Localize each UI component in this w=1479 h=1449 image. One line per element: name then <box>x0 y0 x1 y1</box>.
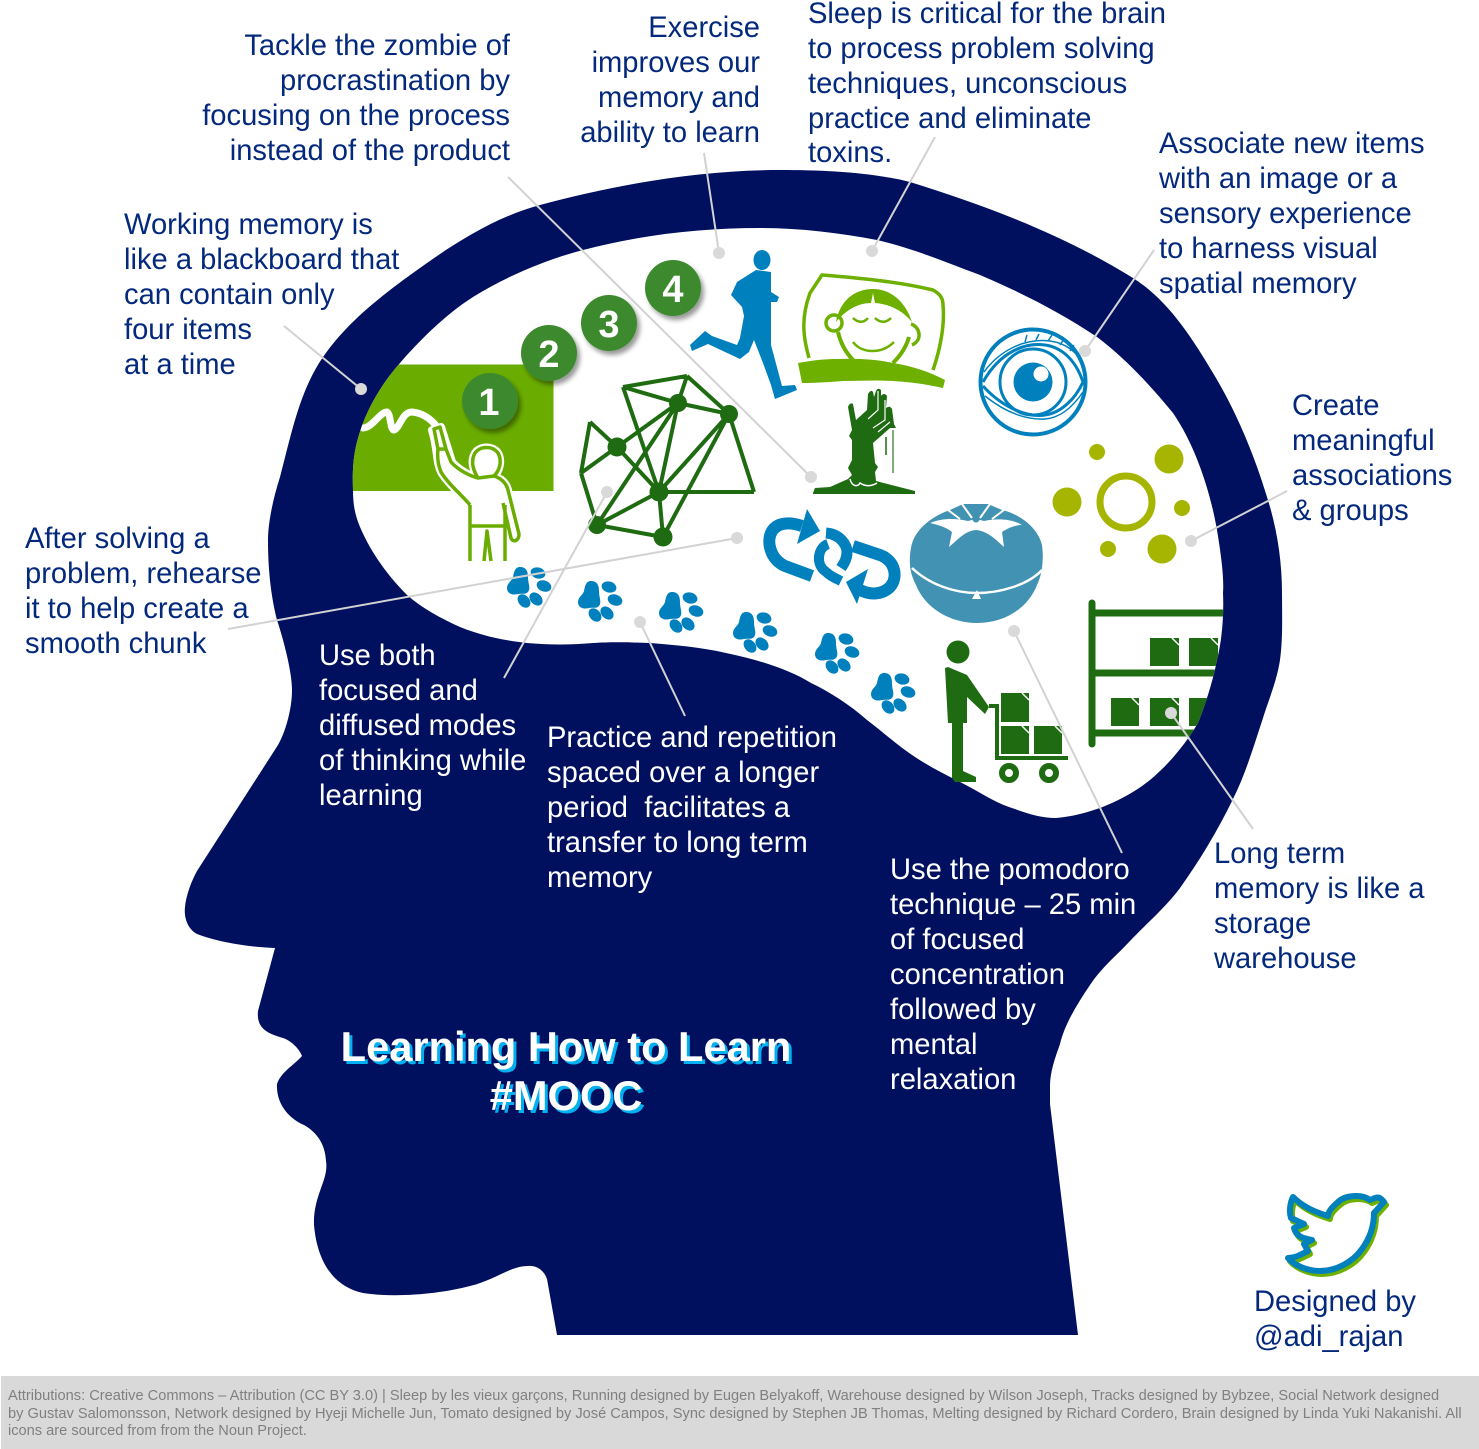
numbered badge 3: 3 <box>598 304 620 346</box>
text: rehearse: smooth chunk <box>25 628 207 660</box>
text: working memory: at a time <box>124 349 236 381</box>
text: sleep: to process problem solving <box>808 33 1155 65</box>
text: focused and diffused: diffused modes <box>319 710 516 742</box>
numbered badge 3 <box>581 295 637 351</box>
title: #MOOC <box>493 1075 645 1122</box>
attribution bar: icons are sourced from from the Noun Project. <box>8 1423 307 1439</box>
text: pomodoro: mental <box>890 1029 977 1061</box>
icon: runner <box>690 250 797 399</box>
text: exercise: ability to learn <box>580 117 760 149</box>
text: focused and diffused: Use both <box>319 640 436 672</box>
text: procrastination: procrastination by <box>280 65 510 97</box>
text: rehearse: problem, rehearse <box>25 558 261 590</box>
attribution bar: by Gustav Salomonsson, Network designed by Hyeji Michelle Jun, Tomato designed by José Campos, Sync designed by Stephen JB Thomas, Melting designed by Richard Cordero, Brain designed by Linda Yuki Nakanishi. All <box>8 1406 1462 1422</box>
title: #MOOC <box>490 1072 642 1119</box>
text: exercise: improves our <box>592 47 760 79</box>
text: focused and diffused: learning <box>319 780 423 812</box>
text: designed by: @adi_rajan <box>1254 1321 1403 1353</box>
text: pomodoro: concentration <box>890 959 1065 991</box>
numbered badge 4: 4 <box>662 269 684 311</box>
text: long term memory: memory is like a <box>1214 873 1425 905</box>
text: associate: with an image or a <box>1158 163 1398 195</box>
numbered badge 1: 1 <box>478 382 500 424</box>
text: associations: associations <box>1292 460 1452 492</box>
text: associate: sensory experience <box>1159 198 1412 230</box>
text: procrastination: Tackle the zombie of <box>244 30 511 62</box>
text: rehearse: it to help create a <box>25 593 249 625</box>
text: rehearse: After solving a <box>25 523 210 555</box>
numbered badge 1 <box>462 373 518 429</box>
title: Learning How to Learn <box>344 1026 794 1073</box>
text: exercise: Exercise <box>648 12 760 44</box>
text: long term memory: storage <box>1214 908 1311 940</box>
text: designed by: Designed by <box>1254 1286 1416 1318</box>
text: focused and diffused: focused and <box>319 675 478 707</box>
numbered badge 4 <box>645 260 701 316</box>
numbered badge 2 <box>521 325 577 381</box>
icon: associations circles <box>1052 444 1190 564</box>
head silhouette <box>185 170 1282 1335</box>
text: pomodoro: followed by <box>890 994 1036 1026</box>
numbered badge 2: 2 <box>538 334 560 376</box>
icon: eye <box>980 330 1086 434</box>
text: procrastination: focusing on the process <box>202 100 510 132</box>
text: focused and diffused: of thinking while <box>319 745 526 777</box>
text: exercise: memory and <box>598 82 760 114</box>
text: working memory: four items <box>124 314 252 346</box>
text: working memory: Working memory is <box>124 209 373 241</box>
text: pomodoro: Use the pomodoro <box>890 854 1130 886</box>
text: pomodoro: of focused <box>890 924 1024 956</box>
title: Learning How to Learn <box>341 1023 791 1070</box>
text: associate: Associate new items <box>1159 128 1425 160</box>
text: sleep: techniques, unconscious <box>808 68 1127 100</box>
text: practice: period facilitates a <box>547 792 791 824</box>
icon: pomodoro tomato <box>910 504 1043 623</box>
text: associations: meaningful <box>1292 425 1435 457</box>
connector lines and dots <box>228 137 1287 853</box>
text: pomodoro: technique – 25 min <box>890 889 1136 921</box>
text: associate: to harness visual <box>1159 233 1378 265</box>
icon: sync arrows <box>769 509 895 604</box>
text: associations: Create <box>1292 390 1379 422</box>
text: practice: Practice and repetition <box>547 722 837 754</box>
icon: twitter bird <box>1288 1196 1386 1274</box>
text: sleep: toxins. <box>808 137 892 169</box>
text: associate: spatial memory <box>1159 268 1357 300</box>
icon: sleeping face <box>798 275 945 388</box>
text: practice: memory <box>547 862 653 894</box>
text: practice: spaced over a longer <box>547 757 819 789</box>
icon: blackboard with figure <box>340 364 554 561</box>
text: long term memory: warehouse <box>1213 943 1357 975</box>
text: practice: transfer to long term <box>547 827 808 859</box>
title <box>341 1023 794 1122</box>
attribution bar: Attributions: Creative Commons – Attribution (CC BY 3.0) | Sleep by les vieux garçons, Running designed by Eugen Belyakoff, Warehouse designed by Wilson Joseph, Tracks designed by Bybzee, Social Network designed <box>8 1388 1439 1404</box>
text: working memory: can contain only <box>124 279 335 311</box>
attribution bar <box>1 1376 1479 1449</box>
icon: network <box>581 376 754 546</box>
icon: worker with cart <box>945 640 1068 782</box>
text: pomodoro: relaxation <box>890 1064 1016 1096</box>
text: long term memory: Long term <box>1214 838 1345 870</box>
icon: paw tracks <box>507 566 917 716</box>
text: sleep: practice and eliminate <box>808 103 1091 135</box>
icon: warehouse shelves <box>1092 603 1230 744</box>
brain cavity <box>353 228 1223 818</box>
text: working memory: like a blackboard that <box>124 244 399 276</box>
text: procrastination: instead of the product <box>230 135 510 167</box>
text: associations: & groups <box>1292 495 1409 527</box>
icon: zombie hand <box>813 389 915 494</box>
